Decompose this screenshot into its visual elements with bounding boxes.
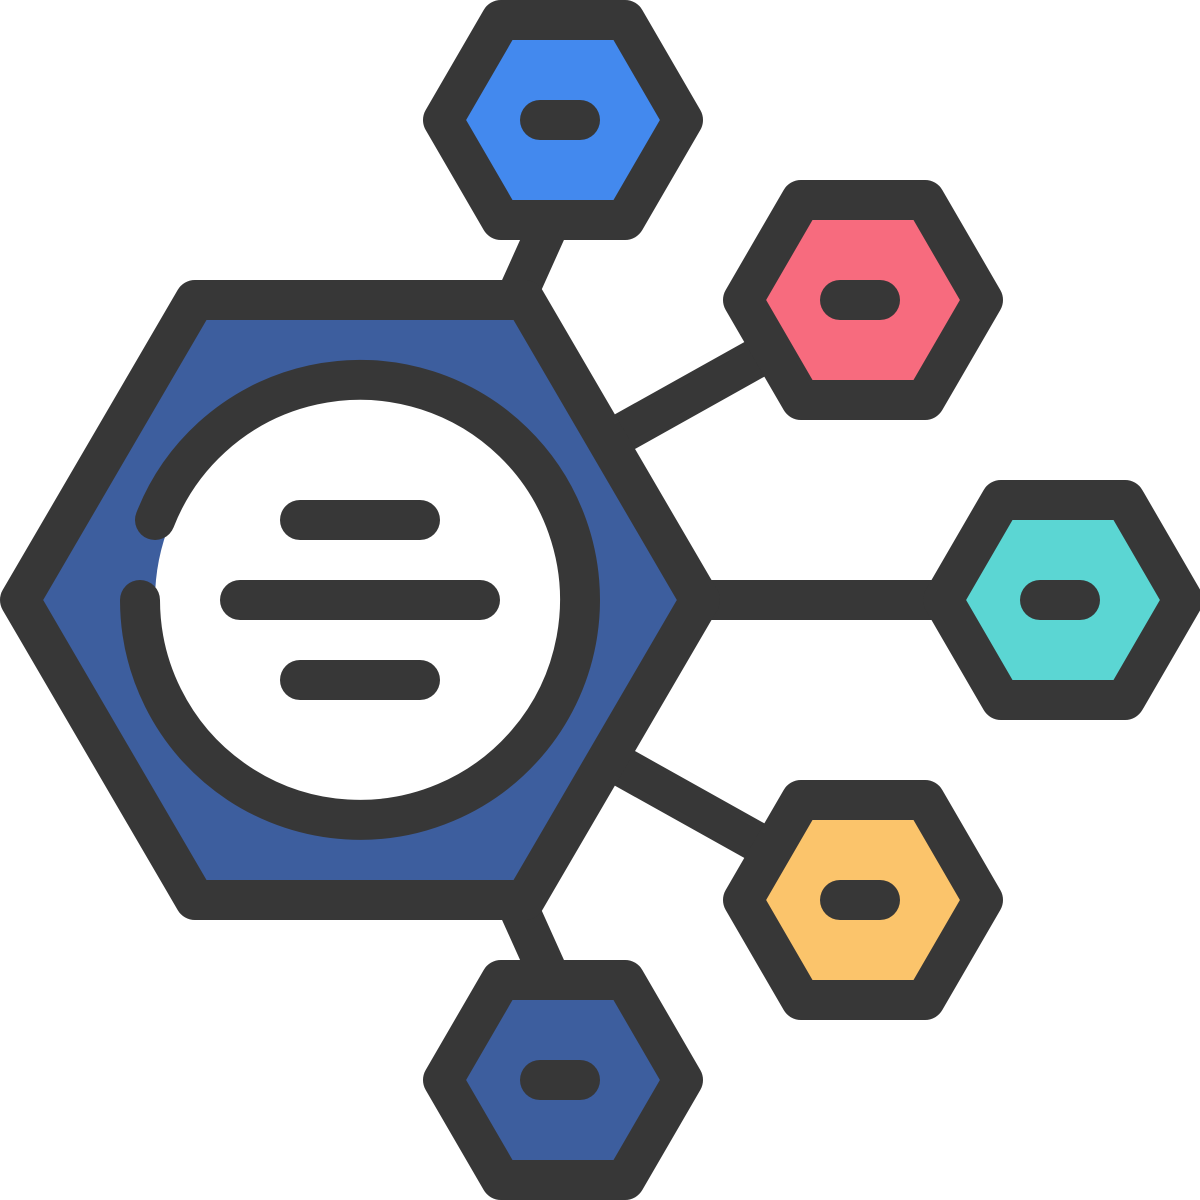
- connectors: [515, 200, 950, 1000]
- hexagon: pink: [743, 200, 983, 400]
- hexagon: yellow: [743, 800, 983, 1000]
- magnifier circle: [140, 380, 580, 820]
- main hexagon: [20, 300, 700, 900]
- hexagon: blue top: [443, 20, 683, 220]
- hexagon: teal: [943, 500, 1183, 700]
- hexagon: dark blue bottom: [443, 980, 683, 1180]
